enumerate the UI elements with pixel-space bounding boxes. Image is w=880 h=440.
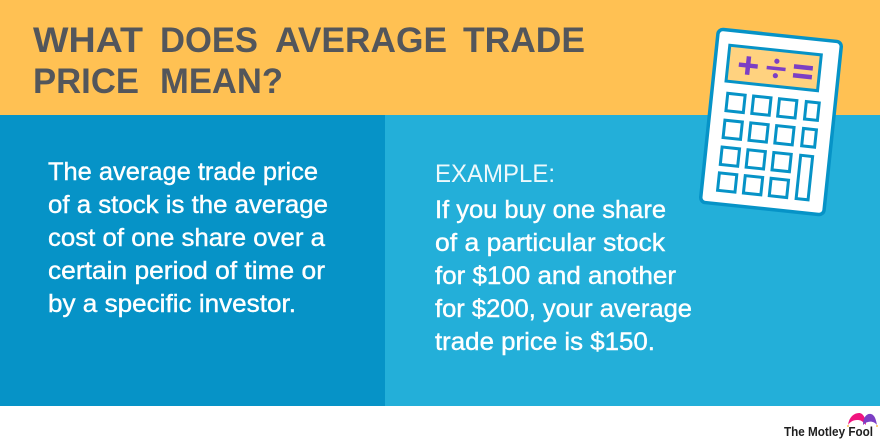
example text: [435, 196, 692, 356]
panel: example: [385, 115, 880, 406]
display symbols: [738, 55, 813, 82]
title: AVERAGE: [275, 21, 447, 60]
icon: jester hat: [847, 413, 878, 427]
example text: of a particular stock: [435, 229, 666, 257]
title: PRICE: [33, 62, 139, 101]
definition text: by a specific investor.: [48, 290, 296, 318]
example text: If you buy one share: [435, 196, 666, 224]
calculator keys: [718, 93, 819, 200]
header band: [0, 0, 880, 115]
example text: for $200, your average: [435, 295, 692, 323]
example text: trade price is $150.: [435, 328, 655, 356]
definition text: cost of one share over a: [48, 224, 325, 252]
title: MEAN?: [160, 62, 283, 101]
title: [33, 21, 585, 101]
icon: calculator: [700, 29, 842, 215]
title: WHAT: [33, 21, 143, 60]
example text: for $100 and another: [435, 262, 676, 290]
calculator display: [726, 45, 821, 91]
panel: definition: [0, 115, 385, 406]
definition text: certain period of time or: [48, 257, 325, 285]
definition text: of a stock is the average: [48, 191, 328, 219]
wordmark: The Motley Fool: [784, 424, 873, 439]
title: TRADE: [463, 21, 585, 60]
logo: The Motley Fool: [784, 413, 878, 439]
example label: EXAMPLE:: [435, 160, 555, 188]
title: DOES: [160, 21, 258, 60]
definition text: The average trade price: [48, 158, 318, 186]
definition text: [48, 158, 328, 318]
